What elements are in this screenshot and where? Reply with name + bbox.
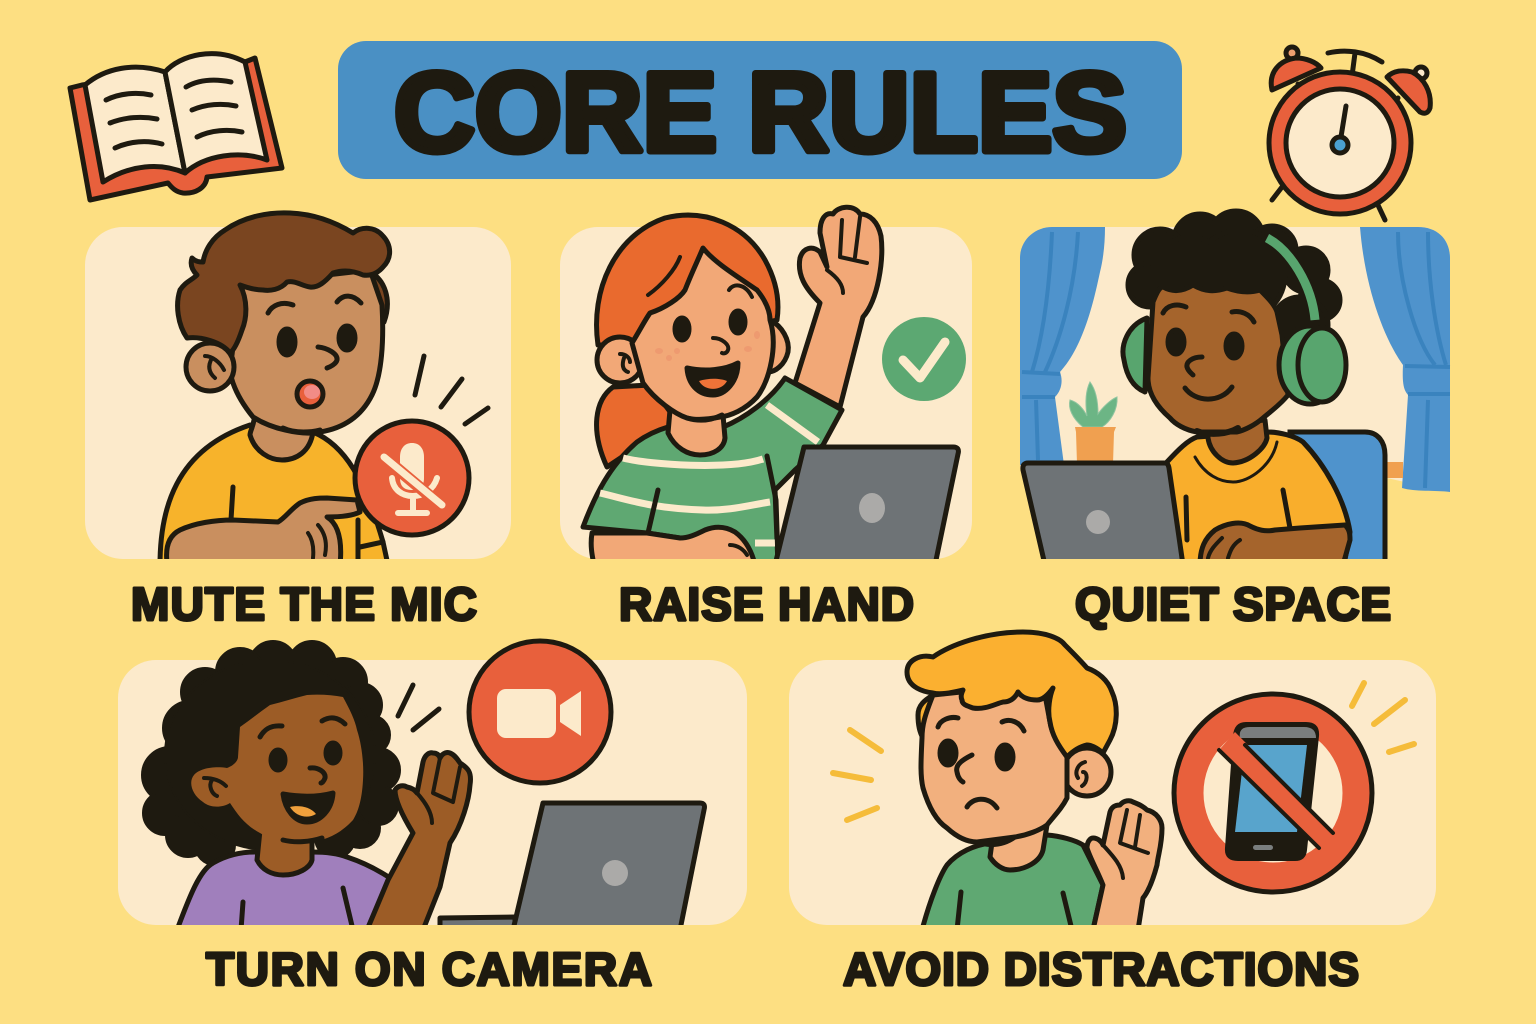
title banner bbox=[338, 41, 1182, 179]
character: girl with curly hair bbox=[142, 641, 471, 930]
icon: open book bbox=[70, 54, 282, 200]
character: blond boy bbox=[907, 632, 1162, 930]
icon: no phone bbox=[1174, 694, 1372, 892]
label: quiet space: QUIET SPACE bbox=[1075, 578, 1391, 630]
label: turn on camera: TURN ON CAMERA bbox=[206, 943, 652, 995]
curtain fold lines bbox=[1022, 232, 1450, 488]
label: mute the mic: MUTE THE MIC bbox=[131, 578, 477, 630]
character: boy with brown hair bbox=[160, 213, 390, 565]
panel: turn on camera bbox=[118, 641, 747, 930]
panel: quiet space bbox=[1020, 211, 1450, 565]
title: CORE RULES bbox=[394, 50, 1127, 175]
icon: video camera bbox=[469, 641, 611, 783]
icon: check badge bbox=[882, 317, 966, 401]
character: child with headphones bbox=[1123, 211, 1350, 565]
curtain left bbox=[1020, 227, 1105, 465]
character: girl with red hair bbox=[583, 207, 882, 565]
accent lines bbox=[415, 356, 488, 424]
curtain right bbox=[1360, 227, 1450, 492]
laptop bbox=[440, 803, 704, 930]
label: raise hand: RAISE HAND bbox=[619, 578, 914, 630]
laptop bbox=[775, 447, 958, 565]
panel: mute the mic bbox=[85, 213, 511, 565]
panel: raise hand bbox=[560, 207, 972, 565]
accent lines bbox=[398, 685, 439, 730]
chair bbox=[1290, 432, 1403, 565]
distraction rays bbox=[833, 683, 1414, 820]
icon: muted microphone bbox=[355, 421, 469, 535]
icon: alarm clock bbox=[1269, 47, 1430, 220]
laptop bbox=[1023, 463, 1183, 565]
plant pot bbox=[1070, 382, 1117, 464]
panel: avoid distractions bbox=[789, 632, 1436, 930]
label: avoid distractions: AVOID DISTRACTIONS bbox=[843, 943, 1359, 995]
